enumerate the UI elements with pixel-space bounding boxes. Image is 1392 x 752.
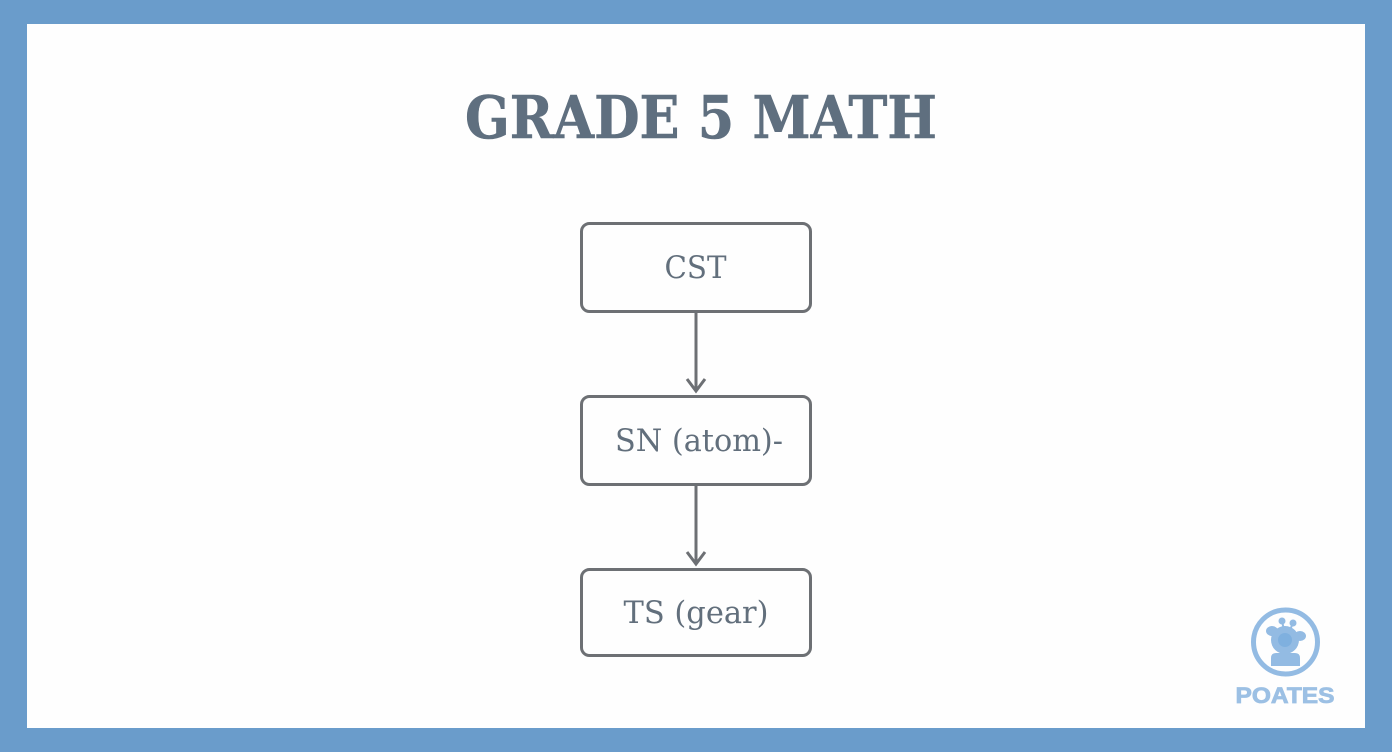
logo wordmark: POATES bbox=[1236, 683, 1334, 708]
flowchart box: CST bbox=[582, 224, 810, 312]
flowchart box: SN (atom): SN (atom)- bbox=[615, 423, 783, 459]
flowchart box: CST: CST bbox=[664, 250, 727, 286]
logo: POATES bbox=[1236, 610, 1334, 708]
flowchart box: TS (gear) bbox=[582, 570, 810, 656]
flowchart box: TS (gear): TS (gear) bbox=[624, 595, 768, 631]
arrow: CST to SN bbox=[687, 312, 705, 391]
flowchart box: SN (atom) bbox=[582, 396, 810, 484]
title: GRADE 5 MATH bbox=[465, 83, 937, 152]
arrow: SN to TS bbox=[687, 485, 705, 564]
icon: robot in circle bbox=[1254, 610, 1318, 674]
